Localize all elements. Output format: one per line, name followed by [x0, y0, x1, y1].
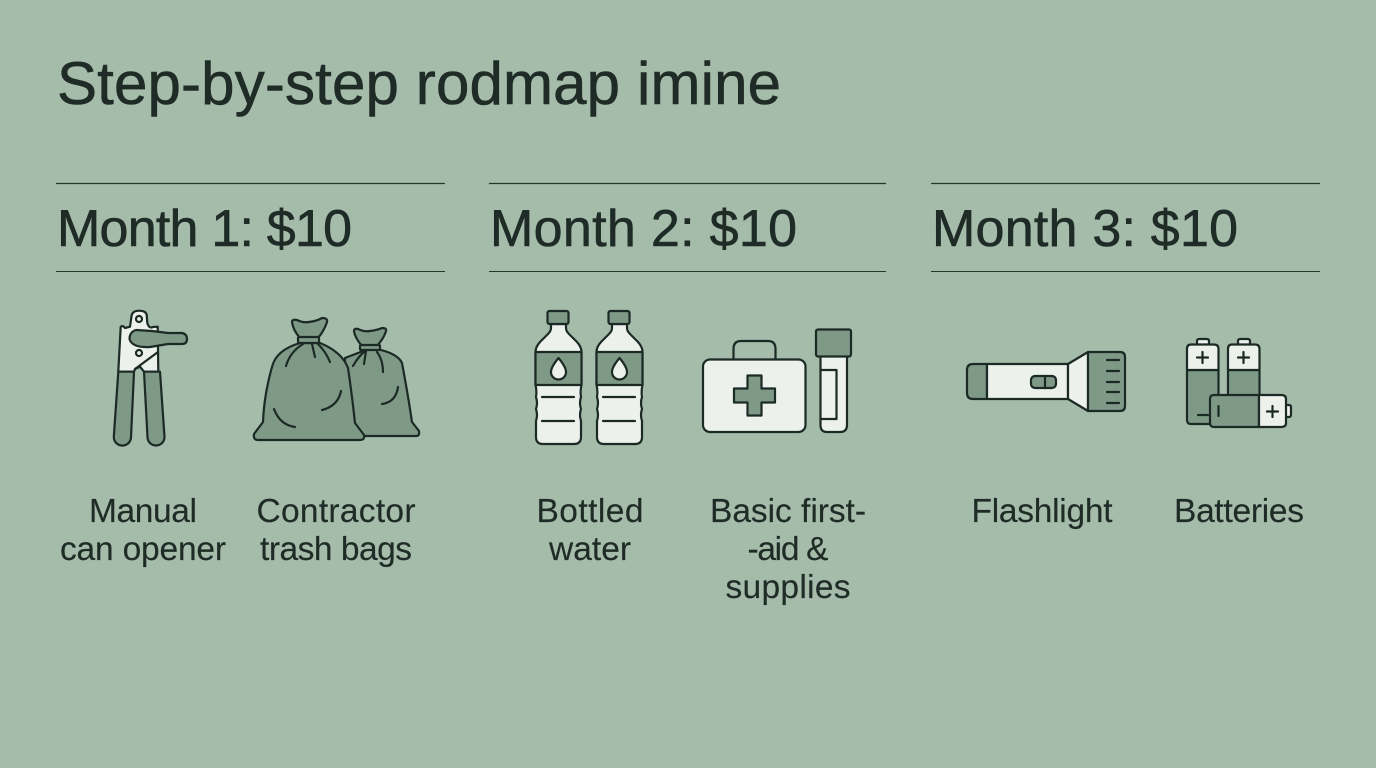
panel: month 2: water	[548, 531, 631, 568]
panel: month 2: supplies	[726, 569, 850, 606]
icon: first-aid kit and supplies	[703, 330, 851, 432]
icon: flashlight	[967, 352, 1125, 411]
icon: manual can opener	[114, 311, 187, 446]
panel: month 3	[931, 184, 1320, 530]
panel: month 1	[56, 184, 445, 568]
heading: month 2: Month 2: $10	[490, 200, 797, 258]
label: basic first-aid and supplies: Basic first-	[710, 493, 866, 530]
title: Step-by-step rodmap imine	[57, 50, 781, 117]
panel: month 1: can opener	[60, 531, 226, 568]
label: batteries: Batteries	[1174, 493, 1304, 530]
heading: month 3: Month 3: $10	[932, 200, 1238, 258]
icon: bottled water	[536, 311, 642, 444]
panel: month 1: trash bags	[260, 531, 412, 568]
label: flashlight: Flashlight	[972, 493, 1113, 530]
label: contractor trash bags: Contractor	[256, 493, 416, 530]
label: bottled water: Bottled	[536, 493, 644, 530]
label: manual can opener: Manual	[89, 493, 197, 530]
panel: month 2	[489, 184, 886, 606]
icon: contractor trash bags	[254, 318, 419, 440]
icon: batteries	[1187, 339, 1291, 427]
panel: month 2: -aid &	[748, 531, 828, 568]
heading: month 1: Month 1: $10	[57, 200, 352, 258]
